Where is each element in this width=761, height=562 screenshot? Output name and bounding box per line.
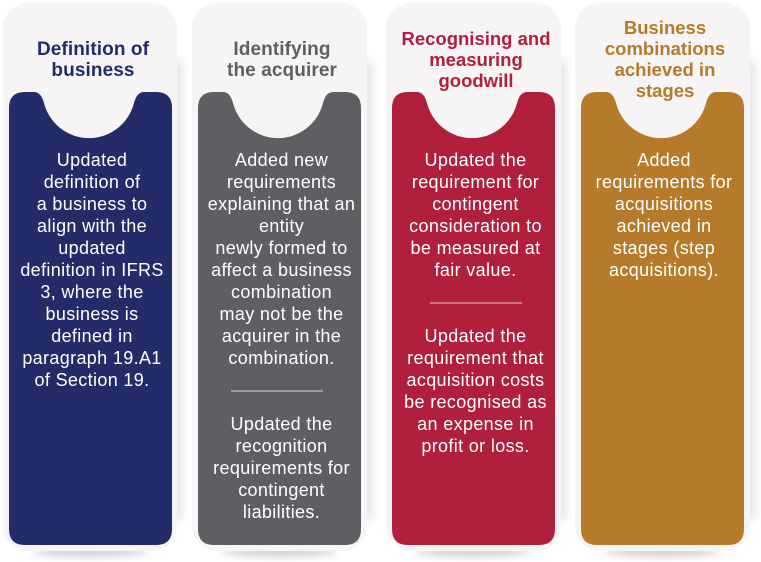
body text: affect a business xyxy=(211,260,352,280)
heading: Definition of xyxy=(37,39,150,60)
heading: Recognising and xyxy=(401,28,551,49)
heading: business xyxy=(51,60,135,81)
panel: identifying the acquirer xyxy=(192,3,372,556)
heading: Identifying xyxy=(233,39,331,60)
body text: a business to xyxy=(37,194,147,214)
panel: business combinations achieved in stages xyxy=(575,3,755,556)
body text 2: an expense in xyxy=(417,414,534,434)
body text: Updated the xyxy=(425,150,526,170)
heading: stages xyxy=(636,80,694,101)
body text 2: requirements for xyxy=(213,458,350,478)
body text: Updated xyxy=(57,150,127,170)
body text: requirements xyxy=(227,172,336,192)
body text 2: requirement that xyxy=(407,348,544,368)
body text: Added xyxy=(637,150,691,170)
body text: contingent xyxy=(432,194,519,214)
body text: requirements for xyxy=(596,172,732,192)
body text: explaining that an xyxy=(208,194,355,214)
body text: fair value. xyxy=(435,260,516,280)
heading: combinations xyxy=(605,38,725,59)
heading: goodwill xyxy=(438,70,514,91)
body text: may not be the xyxy=(220,304,343,324)
panel: recognising and measuring goodwill xyxy=(386,3,566,556)
body text: of Section 19. xyxy=(35,370,149,390)
heading: achieved in xyxy=(615,59,715,80)
body text: combination xyxy=(231,282,332,302)
body text: combination. xyxy=(228,348,335,368)
body text: acquirer in the xyxy=(222,326,341,346)
body text: consideration to xyxy=(409,216,542,236)
body text: stages (step xyxy=(613,238,715,258)
heading: Business xyxy=(624,17,706,38)
body text: definition of xyxy=(44,172,141,192)
body text: business is xyxy=(46,304,138,324)
body text: paragraph 19.A1 xyxy=(22,348,162,368)
body text 2: acquisition costs xyxy=(406,370,545,390)
body text: align with the xyxy=(37,216,147,236)
body text 2: recognition xyxy=(236,436,327,456)
body text 2: contingent xyxy=(238,480,325,500)
body text: defined in xyxy=(51,326,133,346)
body text: requirement for xyxy=(412,172,539,192)
panel: definition of business xyxy=(3,3,182,556)
heading: measuring xyxy=(429,49,523,70)
body text: newly formed to xyxy=(215,238,348,258)
body text: acquisitions). xyxy=(609,260,719,280)
body text 2: Updated the xyxy=(425,326,526,346)
body text 2: profit or loss. xyxy=(421,436,530,456)
body text 2: be recognised as xyxy=(404,392,547,412)
heading: the acquirer xyxy=(227,60,337,81)
body text: updated xyxy=(58,238,126,258)
body text 2: Updated the xyxy=(231,414,332,434)
body text: 3, where the xyxy=(40,282,144,302)
body text: Added new xyxy=(235,150,329,170)
body text: definition in IFRS xyxy=(20,260,164,280)
body text: achieved in xyxy=(617,216,711,236)
body text: acquisitions xyxy=(615,194,713,214)
body text 2: liabilities. xyxy=(243,502,320,522)
body text: be measured at xyxy=(411,238,540,258)
body text: entity xyxy=(259,216,304,236)
